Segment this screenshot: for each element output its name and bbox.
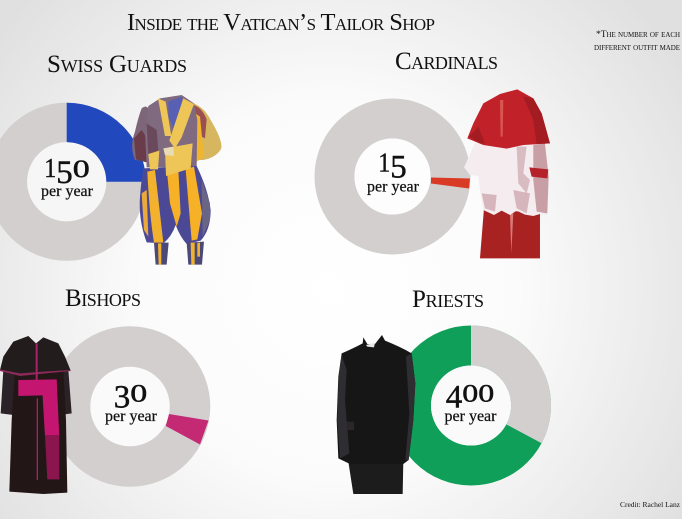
value: 150 per year: 1 xyxy=(44,153,56,183)
value: 150 per year: 0 xyxy=(73,156,90,183)
value: 400 per year xyxy=(445,380,497,425)
panel: priests xyxy=(337,286,551,494)
heading: priests: Priests xyxy=(412,286,484,313)
donut chart: priests xyxy=(411,326,551,466)
footnote: *The number of each xyxy=(596,30,680,40)
value: 30 per year: 3 xyxy=(114,380,130,416)
value: 150 per year xyxy=(41,153,94,200)
panel: cardinals xyxy=(334,48,550,258)
illustration: cardinal vestments xyxy=(464,89,550,258)
value: 150 per year: per year xyxy=(41,183,94,200)
value: 15 per year xyxy=(367,148,420,196)
value: 15 per year: 1 xyxy=(378,148,390,178)
credit: Credit: Rachel Lanz xyxy=(620,500,681,509)
footnote: different outfit made xyxy=(594,43,680,53)
panel: swiss guards xyxy=(7,51,221,265)
value: 150 per year: 5 xyxy=(56,155,73,191)
donut chart: swiss guards xyxy=(7,103,146,241)
illustration: priest suit xyxy=(337,335,415,494)
value: 400 per year: 0 xyxy=(478,380,494,408)
value: 30 per year xyxy=(105,380,158,425)
illustration: swiss guard uniform xyxy=(132,95,221,265)
value: 400 per year: 0 xyxy=(462,380,478,408)
footnote xyxy=(594,30,680,53)
value: 30 per year: per year xyxy=(105,408,158,425)
heading: cardinals: Cardinals xyxy=(395,48,498,75)
value: 30 per year: 0 xyxy=(130,380,147,408)
heading: swiss guards: Swiss Guards xyxy=(47,51,187,78)
donut chart: bishops xyxy=(70,346,208,466)
value: 15 per year: per year xyxy=(367,178,420,196)
value: 400 per year: per year xyxy=(445,408,497,425)
title: Inside the Vatican’s Tailor Shop xyxy=(127,9,435,36)
value: 400 per year: 4 xyxy=(446,380,462,416)
donut chart: cardinals xyxy=(334,118,470,234)
illustration: bishop cassock xyxy=(0,336,72,494)
value: 15 per year: 5 xyxy=(390,150,407,186)
heading: bishops: Bishops xyxy=(65,285,141,312)
panel: bishops xyxy=(0,285,208,494)
